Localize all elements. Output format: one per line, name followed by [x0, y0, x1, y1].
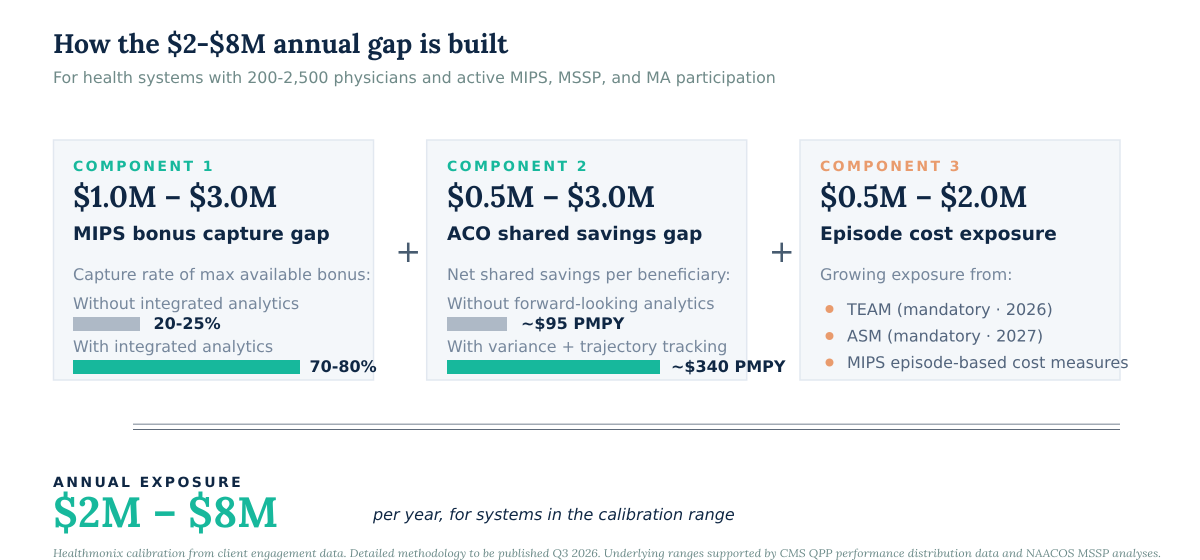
bar: without forward-looking	[447, 317, 507, 331]
panel: component 1	[54, 140, 377, 380]
component 2 amount: $0.5M – $3.0M	[447, 178, 655, 216]
component 3 label: COMPONENT 3	[820, 159, 962, 175]
annual exposure label: ANNUAL EXPOSURE	[53, 475, 243, 491]
subtitle: For health systems with 200-2,500 physicians and active MIPS, MSSP, and MA participation	[53, 68, 776, 87]
per-year note: per year, for systems in the calibration range	[372, 505, 735, 524]
card background 1	[54, 140, 374, 380]
value: 20-25%: 20-25%	[154, 314, 221, 333]
card background 2	[427, 140, 747, 380]
component 1 amount: $1.0M – $3.0M	[73, 178, 277, 216]
without forward-looking label: Without forward-looking analytics	[447, 294, 715, 313]
panel: component 3	[800, 140, 1129, 380]
component 2 caption: Net shared savings per beneficiary:	[447, 265, 731, 284]
bullet: MIPS episode measures: MIPS episode-based cost measures	[847, 353, 1129, 372]
with analytics label: With integrated analytics	[73, 337, 273, 356]
bar: with analytics	[73, 360, 300, 374]
value: ~$340 PMPY: ~$340 PMPY	[671, 357, 786, 376]
value: 70-80%: 70-80%	[310, 357, 377, 376]
annual exposure total: $2M – $8M	[53, 484, 278, 539]
title: How the $2-$8M annual gap is built	[53, 27, 509, 61]
without analytics label: Without integrated analytics	[73, 294, 299, 313]
bar: with variance	[447, 360, 660, 374]
with variance label: With variance + trajectory tracking	[447, 337, 727, 356]
component 1 label: COMPONENT 1	[73, 159, 215, 175]
card background 3	[800, 140, 1120, 380]
component 2 heading: ACO shared savings gap	[447, 224, 702, 245]
component 1 caption: Capture rate of max available bonus:	[73, 265, 371, 284]
plus sign 2: +	[769, 234, 795, 270]
bullet: TEAM: TEAM (mandatory · 2026)	[846, 300, 1053, 319]
bullet: ASM: ASM (mandatory · 2027)	[847, 326, 1043, 346]
panel: component 2	[427, 140, 786, 380]
component 3 amount: $0.5M – $2.0M	[820, 178, 1027, 216]
bar: without analytics	[73, 317, 140, 331]
component 2 label: COMPONENT 2	[447, 159, 589, 175]
value: ~$95 PMPY: ~$95 PMPY	[521, 314, 625, 333]
component 3 heading: Episode cost exposure	[820, 224, 1057, 245]
component 3 caption: Growing exposure from:	[820, 265, 1013, 284]
plus sign 1: +	[395, 234, 421, 270]
component 1 heading: MIPS bonus capture gap	[73, 224, 330, 245]
